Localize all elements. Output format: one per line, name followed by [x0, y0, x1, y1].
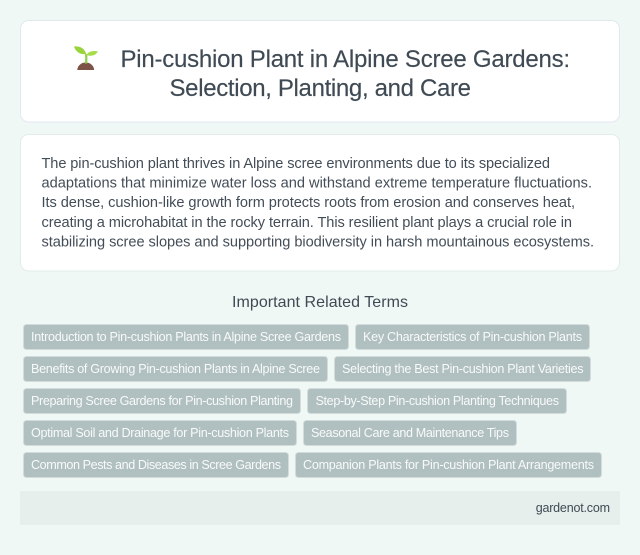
- chip: preparing gardens: [24, 388, 300, 414]
- title: Selection, Planting, and Care: [170, 75, 471, 102]
- icon: seedling: [74, 46, 98, 70]
- panel: description paragraph: Its dense, cushion-like growth form protects roots from erosion and conserves heat,: [42, 195, 575, 211]
- title: Pin-cushion Plant in Alpine Scree Gardens:: [120, 46, 570, 73]
- heading: important related terms: Important Related Terms: [232, 294, 408, 311]
- panel: description paragraph: adaptations that minimize water loss and withstand extreme temperature fluctuations.: [42, 176, 592, 192]
- panel: description paragraph: creating a microhabitat in the rocky terrain. This resilient plant plays a crucial role in: [42, 215, 572, 231]
- panel: description paragraph: [20, 134, 620, 271]
- footer bar: gardenot.com: [536, 501, 610, 515]
- header panel: [20, 20, 620, 122]
- chip: selecting varieties: [334, 356, 590, 382]
- footer bar: [20, 491, 620, 525]
- chip: benefits: [24, 356, 328, 382]
- panel: description paragraph: The pin-cushion plant thrives in Alpine scree environments due to its specialized: [42, 156, 550, 172]
- chip: introduction: Introduction to Pin-cushion Plants in Alpine Scree Gardens: [31, 330, 341, 344]
- panel: description paragraph: stabilizing scree slopes and supporting biodiversity in harsh mountainous ecosystems.: [42, 234, 594, 250]
- chip: companion plants: Companion Plants for Pin-cushion Plant Arrangements: [303, 458, 594, 472]
- chip: planting techniques: [308, 388, 566, 414]
- chip: benefits: Benefits of Growing Pin-cushion Plants in Alpine Scree: [31, 362, 320, 376]
- chip: companion plants: [296, 452, 602, 478]
- chip: pests and diseases: Common Pests and Diseases in Scree Gardens: [31, 458, 281, 472]
- chip: pests and diseases: [24, 452, 288, 478]
- chip: key characteristics: [356, 324, 590, 350]
- chip: planting techniques: Step-by-Step Pin-cushion Planting Techniques: [316, 394, 559, 408]
- chip: soil and drainage: [24, 420, 296, 446]
- chip: seasonal care: Seasonal Care and Maintenance Tips: [311, 426, 509, 440]
- related term chips: [24, 324, 602, 478]
- chip: preparing gardens: Preparing Scree Gardens for Pin-cushion Planting: [31, 394, 293, 408]
- chip: key characteristics: Key Characteristics of Pin-cushion Plants: [363, 330, 582, 344]
- title: [120, 46, 570, 102]
- chip: introduction: [24, 324, 348, 350]
- chip: selecting varieties: Selecting the Best Pin-cushion Plant Varieties: [342, 362, 584, 376]
- chip: seasonal care: [304, 420, 516, 446]
- chip: soil and drainage: Optimal Soil and Drainage for Pin-cushion Plants: [31, 426, 289, 440]
